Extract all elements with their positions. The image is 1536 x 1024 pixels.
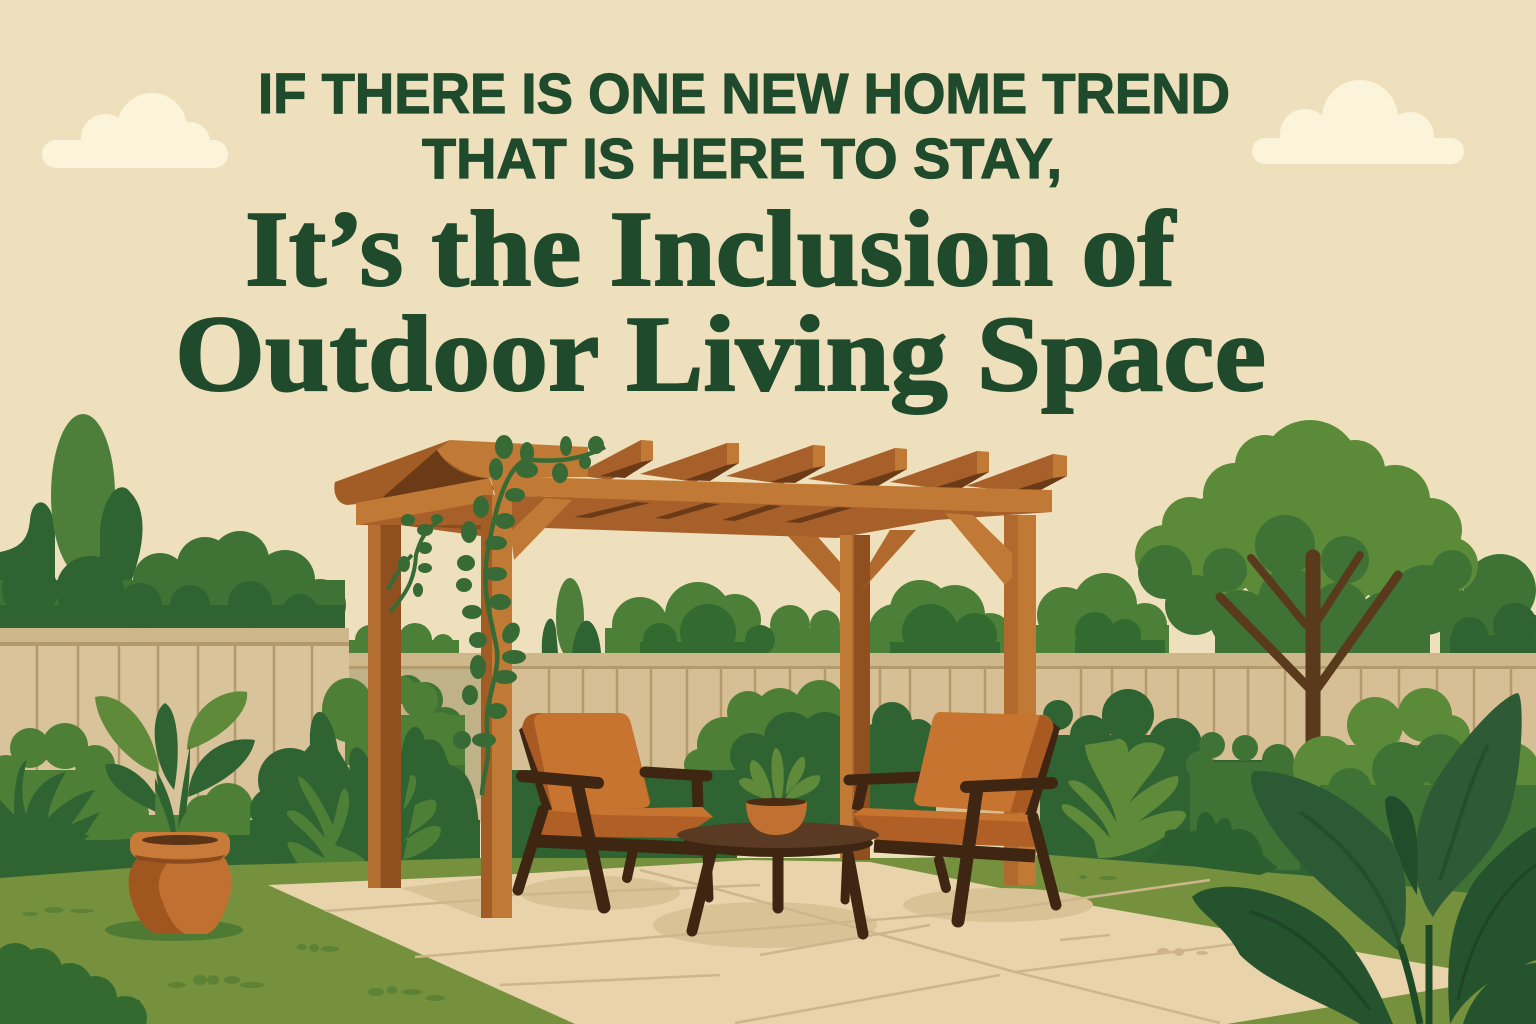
coffee table xyxy=(677,822,879,934)
shrubs centre xyxy=(512,680,936,858)
pergola left side beam xyxy=(334,440,588,525)
pot body xyxy=(129,855,231,934)
tree trunk xyxy=(1220,555,1398,750)
pergola front beam xyxy=(490,476,1052,512)
foreground leaves xyxy=(1192,693,1536,1024)
potted plant left xyxy=(95,691,255,934)
leaf large centre xyxy=(1251,771,1406,950)
pot shade xyxy=(129,855,185,934)
bush bottom left xyxy=(0,943,147,1024)
pergola underside xyxy=(357,495,1052,555)
pot shadow xyxy=(105,919,243,941)
leaf lower left xyxy=(1192,887,1393,1024)
pergola centre post xyxy=(840,535,870,860)
back right tree xyxy=(1135,420,1478,653)
heading line 3: It’s the Inclusion of xyxy=(245,190,1177,309)
cloud right xyxy=(1252,80,1464,164)
pot rim xyxy=(130,832,230,858)
heading line 2: THAT IS HERE TO STAY, xyxy=(422,127,1062,191)
pergola rafters xyxy=(575,440,1067,493)
title xyxy=(175,62,1266,414)
leaf right xyxy=(1448,827,1536,1024)
post left xyxy=(368,525,401,888)
pebbles on patio xyxy=(1157,948,1208,956)
stems xyxy=(1400,925,1429,1024)
chair right xyxy=(849,712,1060,921)
patio shadows xyxy=(400,876,1093,948)
heading line 1: IF THERE IS ONE NEW HOME TREND xyxy=(258,62,1230,126)
lawn xyxy=(0,855,1536,1024)
fence right xyxy=(349,653,1536,823)
leaf bottom right xyxy=(1463,963,1536,1024)
small dark shrub right xyxy=(1145,812,1278,875)
fence left xyxy=(0,628,349,853)
heading line 4: Outdoor Living Space xyxy=(175,295,1266,414)
leaf upper right xyxy=(1415,693,1522,917)
back left trees xyxy=(0,414,346,631)
pergola front post xyxy=(481,495,512,918)
vine main xyxy=(453,435,605,795)
pergola left and back posts xyxy=(368,515,1036,888)
leaf narrow xyxy=(1385,796,1418,895)
cloud left xyxy=(42,93,228,168)
patio joints xyxy=(325,870,1290,1023)
post right back xyxy=(1004,515,1036,885)
back middle bushes xyxy=(349,554,1536,660)
grass tufts xyxy=(22,875,1117,1001)
chair left xyxy=(518,713,713,907)
vine secondary xyxy=(388,514,443,612)
shrubs right xyxy=(1040,688,1536,900)
shrubs left xyxy=(0,675,480,880)
patio xyxy=(268,860,1505,1024)
pergola braces xyxy=(512,498,1012,597)
shrub light leaves right xyxy=(1062,739,1186,858)
table plant xyxy=(739,748,820,835)
